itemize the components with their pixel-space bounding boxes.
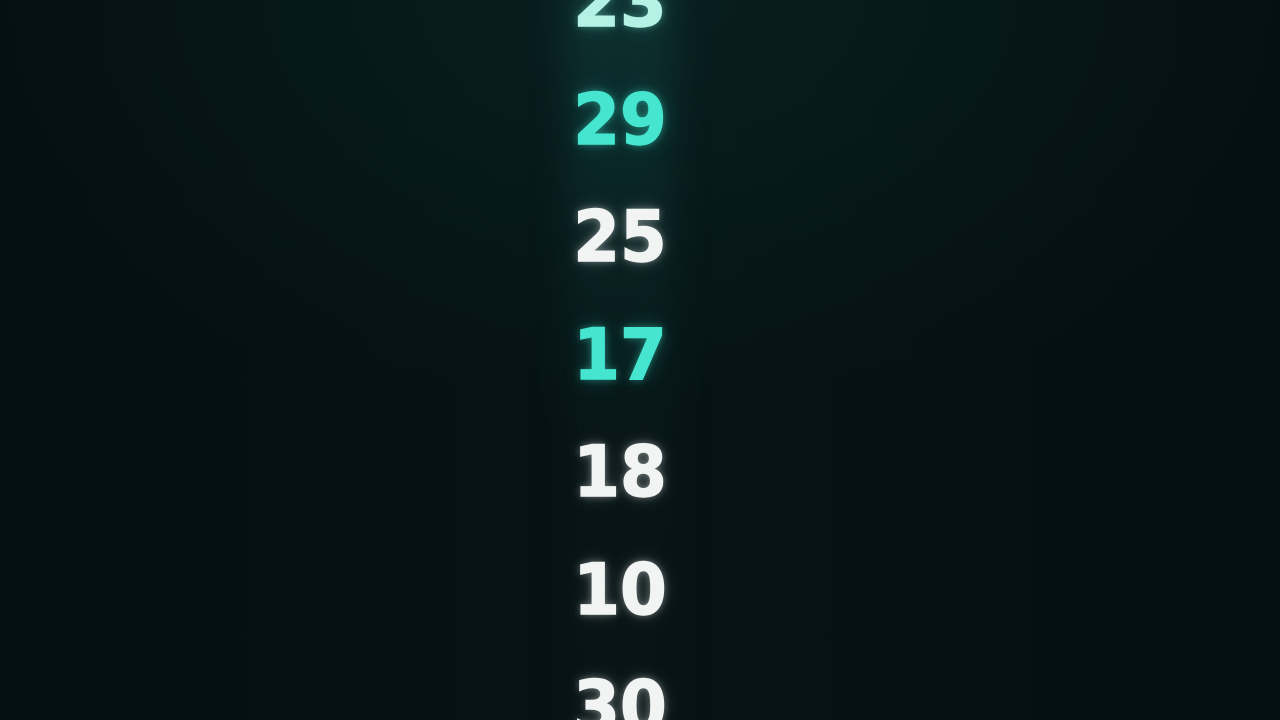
column glow bbox=[565, 0, 675, 720]
number: 17: 17 bbox=[573, 314, 667, 396]
number: 10: 10 bbox=[573, 549, 667, 631]
number: 25: 25 bbox=[573, 196, 667, 278]
number: 29: 29 bbox=[573, 79, 667, 161]
number: 18: 18 bbox=[573, 431, 667, 513]
